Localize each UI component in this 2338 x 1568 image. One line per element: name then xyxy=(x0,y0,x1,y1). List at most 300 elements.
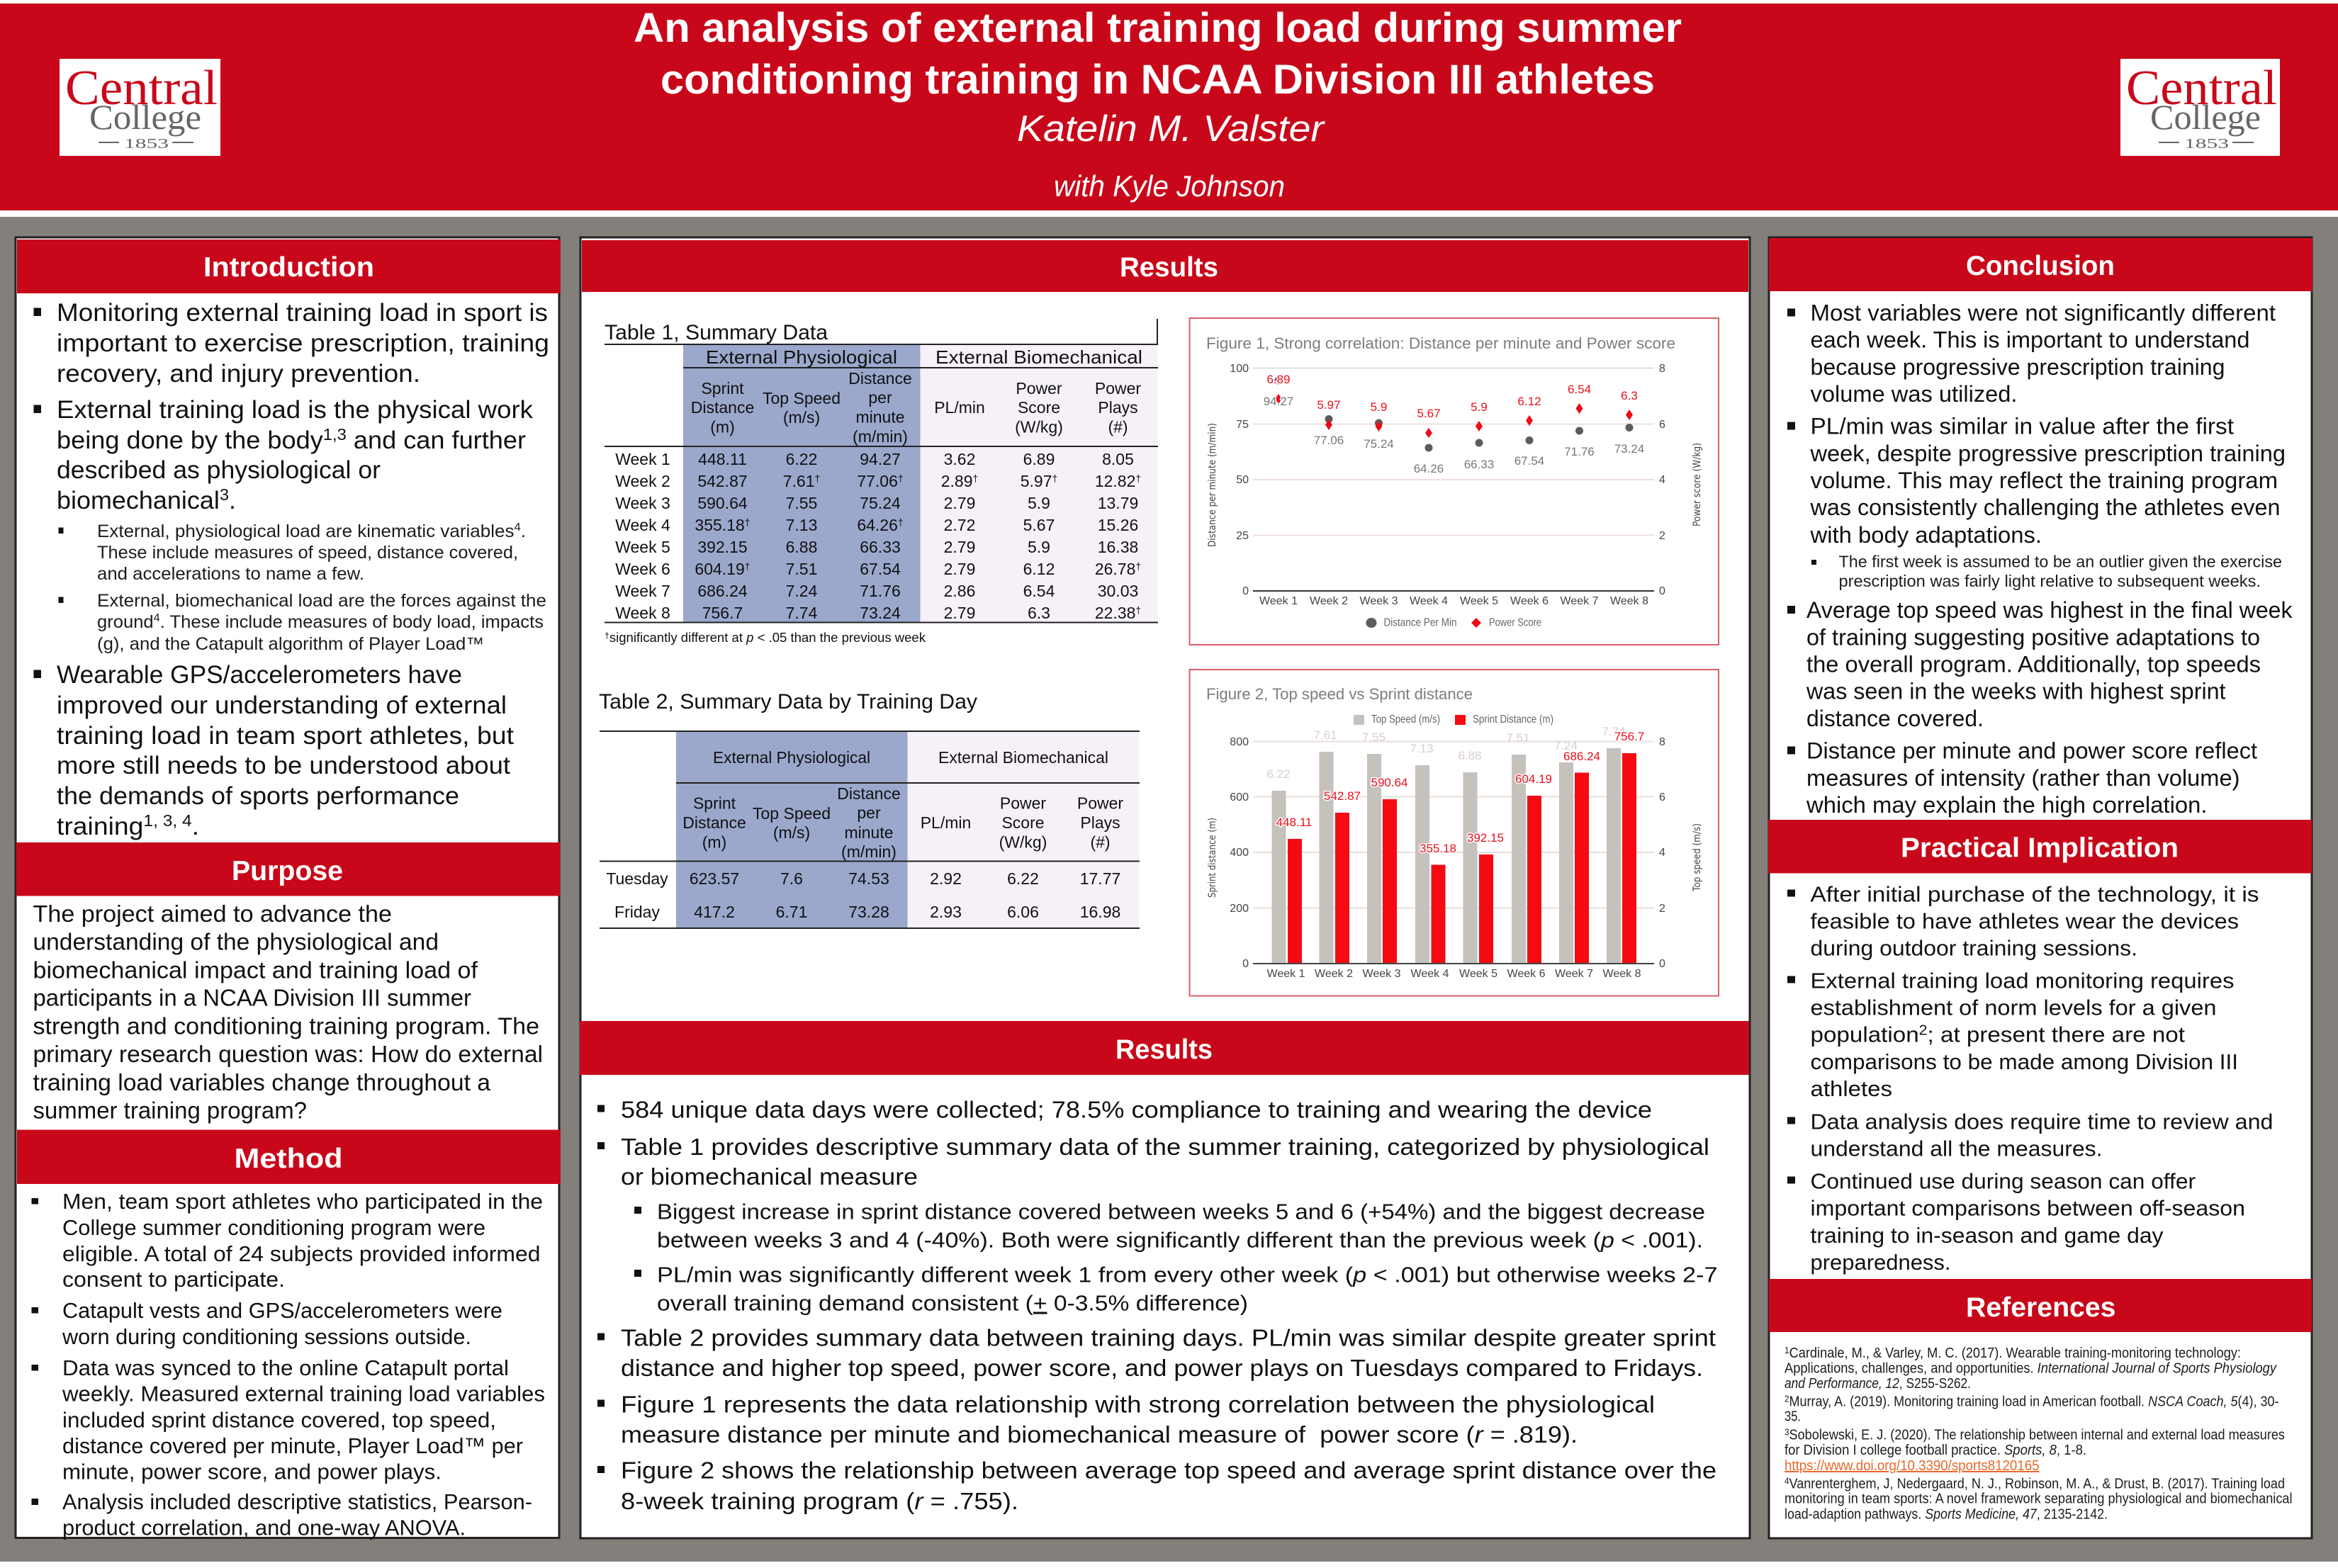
table 1: summary data: 6.3 xyxy=(1028,604,1050,622)
table 1: summary data: Week 7 xyxy=(615,582,670,600)
text block: references: Applications, challenges, and opportunities. International Journal of Sports Physiology xyxy=(1785,1360,2277,1376)
table 2: summary data by training day: (m/s) xyxy=(773,823,810,842)
table 1: summary data: 6.89 xyxy=(1023,450,1055,468)
table 1: summary data: 13.79 xyxy=(1098,494,1138,512)
chart: figure 2 bars: Week 4 xyxy=(1411,968,1449,980)
heading: purpose: Purpose xyxy=(232,856,343,886)
text block: introduction: improved our understanding of external xyxy=(57,692,507,719)
table 1: summary data: 6.12 xyxy=(1023,560,1055,578)
chart: figure 1 scatter: 0 xyxy=(1659,585,1665,597)
table 2: summary data by training day: minute xyxy=(844,823,894,842)
text block: conclusion: because progressive prescription training xyxy=(1810,354,2225,380)
text block: method: product correlation, and one-way ANOVA. xyxy=(62,1515,466,1540)
text block: introduction: recovery, and injury prevention. xyxy=(57,360,420,388)
table 2: summary data by training day: Distance xyxy=(682,813,746,832)
text block: method: included sprint distance covered, top speed, xyxy=(62,1407,496,1433)
text block: results xyxy=(597,1097,1718,1514)
text block: conclusion: distance covered. xyxy=(1806,706,1984,731)
chart: figure 2 bars: Week 3 xyxy=(1363,968,1401,980)
text block: purpose: summer training program? xyxy=(33,1097,307,1124)
table 1: summary data: 756.7 xyxy=(702,604,743,622)
table 1: summary data: Week 4 xyxy=(615,516,670,534)
text block: purpose: biomechanical impact and training load of xyxy=(33,957,478,983)
text block: introduction: described as physiological or xyxy=(57,456,381,484)
table 2: summary data by training day: Plays xyxy=(1080,813,1120,832)
text block: conclusion: of training suggesting positive adaptations to xyxy=(1806,625,2260,650)
table 1: summary data: 5.9 xyxy=(1028,538,1050,556)
text block: conclusion: PL/min was similar in value after the first xyxy=(1810,414,2234,439)
table 1: summary data: 22.38† xyxy=(1095,604,1141,622)
text block: introduction: the demands of sports performance xyxy=(57,782,459,810)
text block: conclusion xyxy=(1787,300,2293,818)
table 1: summary data: Sprint xyxy=(701,379,744,397)
table 1: summary data: 66.33 xyxy=(860,538,901,556)
text block: practical implication: understand all the measures. xyxy=(1810,1136,2102,1161)
text block: practical implication: Data analysis does require time to review and xyxy=(1810,1110,2274,1134)
chart: figure 1 scatter: 64.26 xyxy=(1414,462,1444,475)
text block: practical implication: Continued use during season can offer xyxy=(1810,1169,2196,1193)
table 1: summary data: 542.87 xyxy=(697,472,748,490)
table 2: summary data by training day: per xyxy=(857,803,881,822)
text block: conclusion: volume. This may reflect the training program xyxy=(1810,468,2278,493)
text block: introduction: External training load is the physical work xyxy=(57,396,534,424)
text block: references: and Performance, 12, S255-S262. xyxy=(1785,1376,1971,1392)
text block: references: for Division I college football practice. Sports, 8, 1-8. xyxy=(1785,1443,2086,1458)
text block: conclusion: each week. This is important to understand xyxy=(1810,327,2249,353)
legend: Sprint Distance (m) xyxy=(1473,714,1553,726)
heading: introduction: Introduction xyxy=(203,252,374,283)
table 2: summary data by training day: Tuesday xyxy=(606,869,668,888)
chart: figure 2 bars: 756.7 xyxy=(1614,730,1644,743)
chart: figure 2 bars: 800 xyxy=(1230,736,1249,748)
text block: introduction: These include measures of speed, distance covered, xyxy=(97,543,518,563)
table 1: summary data: 16.38 xyxy=(1098,538,1138,556)
table 2: summary data by training day: 2.92 xyxy=(930,869,962,888)
legend xyxy=(1354,714,1553,726)
text block: method: weekly. Measured external training load variables xyxy=(62,1382,545,1406)
chart: figure 2 bars: 7.13 xyxy=(1410,742,1434,755)
text block: conclusion: measures of intensity (rather than volume) xyxy=(1806,765,2239,791)
chart: figure 1 scatter: Week 7 xyxy=(1561,595,1599,607)
logo: left: Central xyxy=(65,61,218,115)
heading: references: References xyxy=(1966,1292,2116,1323)
table 2: summary data by training day xyxy=(599,690,1140,928)
table 1: summary data: 2.79 xyxy=(944,604,975,622)
table 1: summary data: 8.05 xyxy=(1102,450,1134,468)
text block: introduction: training 1, 3, 4. xyxy=(57,811,199,840)
chart: figure 2 bars: Week 1 xyxy=(1267,968,1305,980)
table 1: summary data: Power xyxy=(1016,379,1062,397)
chart: figure 2 bars: 8 xyxy=(1659,736,1665,748)
text block: practical implication: comparisons to be made among Division III xyxy=(1810,1049,2238,1074)
text block: practical implication: External training load monitoring requires xyxy=(1810,968,2234,993)
text block: results: PL/min was significantly different week 1 from every other week ( p < .001) but otherwise weeks 2-7 xyxy=(657,1263,1718,1287)
text block: introduction xyxy=(34,299,549,840)
chart: figure 2 bars: 400 xyxy=(1230,847,1249,859)
table 2: summary data by training day: (#) xyxy=(1090,833,1111,852)
panel: right column xyxy=(1768,237,2312,1538)
table 1: summary data xyxy=(605,319,1158,645)
text block: introduction: important to exercise prescription, training xyxy=(57,329,549,357)
data points: distance per minute xyxy=(1274,377,1633,452)
chart: figure 1 scatter: 75.24 xyxy=(1364,437,1394,451)
text block: purpose xyxy=(33,901,543,1124)
legend: Distance Per Min xyxy=(1383,616,1457,629)
logo: left xyxy=(60,59,220,156)
text block: introduction: more still needs to be understood about xyxy=(57,752,510,779)
chart: figure 2 bars: 7.51 xyxy=(1506,731,1530,745)
table 1: summary data: 2.79 xyxy=(944,560,975,578)
chart: figure 2 bars: 0 xyxy=(1242,958,1249,970)
logo: right: 1853 xyxy=(2184,136,2229,152)
table 1: summary data: (#) xyxy=(1108,418,1128,436)
legend xyxy=(1366,616,1541,629)
table 1: summary data: 75.24 xyxy=(860,494,901,512)
text block: references: 35. xyxy=(1785,1409,1801,1424)
table 1: summary data: 2.79 xyxy=(944,538,975,556)
text block: references: 4Vanrenterghem, J, Nedergaard, N. J., Robinson, M. A., & Drust, B. (2017). Training load xyxy=(1785,1475,2285,1492)
chart: figure 1 scatter xyxy=(1189,318,1719,645)
logo: left: College xyxy=(89,97,201,137)
text block: conclusion: was consistently challenging the athletes even xyxy=(1809,495,2281,520)
text block: results: between weeks 3 and 4 (-40%). Both were significantly different than the previous week ( p < .001). xyxy=(657,1227,1703,1253)
chart: figure 2 bars: 6.22 xyxy=(1266,767,1291,781)
chart: figure 2 bars: 600 xyxy=(1230,791,1249,803)
chart: figure 2 bars: 355.18 xyxy=(1420,842,1456,855)
heading: results (lower): Results xyxy=(1115,1034,1213,1065)
table 1: summary data: 3.62 xyxy=(944,450,975,468)
table 1: summary data: 7.61† xyxy=(783,472,820,490)
table 2: summary data by training day: Power xyxy=(1000,794,1046,812)
chart: figure 2 bars: 4 xyxy=(1659,847,1665,859)
table 1: summary data: 30.03 xyxy=(1098,582,1138,600)
table 1: summary data: 2.72 xyxy=(944,516,975,534)
table 2: summary data by training day: (m/min) xyxy=(841,842,897,861)
table 1: summary data: 5.67 xyxy=(1023,516,1055,534)
text block: conclusion: The first week is assumed to be an outlier given the exercise xyxy=(1838,553,2282,571)
text block: practical implication: important comparisons between off-season xyxy=(1810,1196,2245,1220)
table 1: summary data: †significantly different at p < .05 than the previous week xyxy=(605,631,926,645)
chart: figure 2 bars: 0 xyxy=(1659,958,1665,970)
table 2: summary data by training day: 7.6 xyxy=(780,869,803,888)
chart: figure 2 bars: 2 xyxy=(1659,903,1665,915)
table 1: summary data: 71.76 xyxy=(860,582,901,600)
table 1: summary data: 2.79 xyxy=(944,494,975,512)
table 1: summary data: External Physiological xyxy=(706,346,897,368)
chart: figure 2 bars: 448.11 xyxy=(1276,816,1312,829)
logo: left: 1853 xyxy=(124,136,169,152)
text block: purpose: primary research question was: How do external xyxy=(33,1041,543,1067)
table 2: summary data by training day: PL/min xyxy=(921,813,971,832)
chart: figure 1 scatter: Week 2 xyxy=(1310,595,1348,607)
text block: practical implication: preparedness. xyxy=(1810,1250,1950,1275)
chart: figure 1 scatter: Week 3 xyxy=(1360,595,1398,607)
chart: figure 2 bars: Week 6 xyxy=(1507,968,1546,980)
chart: figure 1 scatter: 5.67 xyxy=(1417,407,1441,420)
table 2: summary data by training day: Sprint xyxy=(693,794,736,812)
title: conditioning training in NCAA Division III athletes xyxy=(661,57,1655,103)
legend: Power Score xyxy=(1489,616,1541,629)
chart: figure 2 bars: 6.88 xyxy=(1458,749,1482,762)
table 1: summary data: minute xyxy=(855,408,905,427)
chart: figure 1 scatter: Figure 1, Strong correlation: Distance per minute and Power score xyxy=(1206,334,1675,352)
text block: introduction: ground4. These include measures of body load, impacts xyxy=(97,612,544,632)
text block: references: https://www.doi.org/10.3390/sports8120165 xyxy=(1785,1458,2040,1474)
table 1: summary data: (m/min) xyxy=(853,427,908,446)
text block: introduction: biomechanical 3. xyxy=(57,485,236,514)
chart: figure 2 bars: 542.87 xyxy=(1324,789,1361,803)
chart: figure 1 scatter: 5.9 xyxy=(1371,400,1387,414)
text block: introduction: Monitoring external training load in sport is xyxy=(57,299,548,327)
table 1: summary data: 26.78† xyxy=(1095,560,1141,578)
chart: figure 1 scatter: 6 xyxy=(1659,419,1665,431)
text block: purpose: strength and conditioning training program. The xyxy=(33,1013,539,1039)
chart: figure 1 scatter: 8 xyxy=(1659,363,1665,375)
text block: results: Figure 2 shows the relationship between average top speed and average sprint distance over the xyxy=(621,1457,1716,1484)
text block: references: 1Cardinale, M., & Varley, M. C. (2017). Wearable training-monitoring technology: xyxy=(1785,1345,2241,1361)
table 1: summary data: (W/kg) xyxy=(1015,418,1063,436)
author: Katelin M. Valster xyxy=(1017,108,1326,150)
text block: method: minute, power score, and power plays. xyxy=(62,1460,442,1484)
chart: figure 2 bars: 6 xyxy=(1659,791,1665,803)
chart: figure 2 bars: 200 xyxy=(1230,903,1249,915)
table 1: summary data: Distance xyxy=(691,398,754,417)
text block: conclusion: Average top speed was highest in the final week xyxy=(1806,597,2293,623)
text block: introduction: Wearable GPS/accelerometers have xyxy=(57,661,462,689)
chart: figure 2 bars: 7.55 xyxy=(1362,731,1386,744)
text block: introduction: External, biomechanical load are the forces against the xyxy=(97,591,546,611)
text block: results: Table 2 provides summary data between training days. PL/min was similar despite greater sprint xyxy=(621,1325,1716,1350)
table 1: summary data: 2.89† xyxy=(941,472,978,490)
text block: references: monitoring in team sports: A novel framework separating physiological and biomechanical xyxy=(1785,1491,2292,1506)
text block: practical implication xyxy=(1787,881,2274,1275)
chart: figure 1 scatter: 6.54 xyxy=(1568,383,1591,396)
chart: figure 1 scatter: 50 xyxy=(1236,474,1249,486)
chart: figure 1 scatter: Power score (W/kg) xyxy=(1692,443,1703,526)
chart: figure 1 scatter: 71.76 xyxy=(1564,445,1595,458)
text block: introduction: being done by the body 1,3 and can further xyxy=(57,425,526,454)
table 1: summary data: 67.54 xyxy=(860,560,901,578)
chart: figure 1 scatter: Week 1 xyxy=(1259,595,1298,607)
logo: right: College xyxy=(2150,97,2261,137)
title: An analysis of external training load during summer xyxy=(634,5,1682,51)
legend: Top Speed (m/s) xyxy=(1371,714,1440,726)
table 1: summary data: 686.24 xyxy=(697,582,748,600)
text block: method: Men, team sport athletes who participated in the xyxy=(62,1189,543,1214)
table 1: summary data: 7.13 xyxy=(786,516,817,534)
table 1: summary data: 6.22 xyxy=(786,450,817,468)
heading: conclusion: Conclusion xyxy=(1966,251,2115,281)
panel: middle column xyxy=(580,237,1750,1538)
table 1: summary data: Plays xyxy=(1098,398,1138,417)
table 1: summary data: Top Speed xyxy=(763,389,841,407)
table 1: summary data: 604.19† xyxy=(695,560,751,578)
text block: practical implication: After initial purchase of the technology, it is xyxy=(1810,881,2259,907)
chart: figure 1 scatter: 6.12 xyxy=(1517,395,1541,408)
table 1: summary data: 6.88 xyxy=(786,538,817,556)
table 2: summary data by training day: 623.57 xyxy=(690,869,739,888)
text block: references xyxy=(1785,1345,2292,1522)
table 1: summary data: 448.11 xyxy=(698,450,747,468)
text block: conclusion: prescription was fairly light relative to subsequent weeks. xyxy=(1838,572,2261,590)
table 1: summary data: 77.06† xyxy=(857,472,904,490)
text block: conclusion: with body adaptations. xyxy=(1809,522,2042,548)
text block: results: Figure 1 represents the data relationship with strong correlation between the physiological xyxy=(621,1392,1655,1417)
header banner xyxy=(0,4,2338,210)
chart: figure 2 bars: Week 2 xyxy=(1315,968,1353,980)
chart: figure 2 bars: Top speed (m/s) xyxy=(1692,823,1703,892)
table 2: summary data by training day: External Physiological xyxy=(713,748,870,767)
chart: figure 1 scatter: 94.27 xyxy=(1264,395,1293,408)
text block: method: Data was synced to the online Catapult portal xyxy=(62,1355,509,1380)
chart: figure 1 scatter: 2 xyxy=(1659,530,1665,542)
table 1: summary data: 7.51 xyxy=(786,560,817,578)
table 2: summary data by training day: (m) xyxy=(702,833,726,852)
co-author: with Kyle Johnson xyxy=(1054,169,1285,203)
chart: figure 1 scatter: 6.3 xyxy=(1621,389,1638,402)
text block: references: 2Murray, A. (2019). Monitoring training load in American football. NSCA Coach, 5(4), 30- xyxy=(1785,1393,2279,1410)
table 1: summary data: 73.24 xyxy=(860,604,901,622)
chart: figure 2 bars: Week 8 xyxy=(1603,968,1641,980)
chart: figure 1 scatter: Week 5 xyxy=(1460,595,1498,607)
table 1: summary data: 7.74 xyxy=(786,604,818,622)
text block: results: measure distance per minute and biomechanical measure of power score ( r = .819). xyxy=(621,1421,1578,1448)
table 1: summary data: 392.15 xyxy=(697,538,748,556)
text block: conclusion: Most variables were not significantly different xyxy=(1810,300,2276,326)
table 2: summary data by training day: 6.71 xyxy=(776,903,807,921)
table 1: summary data: Distance xyxy=(848,369,912,388)
chart: figure 2 bars: Figure 2, Top speed vs Sprint distance xyxy=(1206,685,1473,703)
text block: introduction: training load in team sport athletes, but xyxy=(57,722,514,750)
text block: conclusion: Distance per minute and power score reflect xyxy=(1806,738,2257,764)
table 1: summary data: Week 6 xyxy=(615,560,670,578)
chart: figure 2 bars: 7.61 xyxy=(1313,728,1337,742)
table 1: summary data: (m/s) xyxy=(783,408,820,427)
table 1: summary data: 5.97† xyxy=(1021,472,1057,490)
table 2: summary data by training day: External Biomechanical xyxy=(938,748,1108,767)
text block: conclusion: volume was utilized. xyxy=(1810,381,2017,407)
table 2: summary data by training day: 73.28 xyxy=(848,903,889,921)
chart: figure 1 scatter: Week 6 xyxy=(1510,595,1549,607)
table 2: summary data by training day: Table 2, Summary Data by Training Day xyxy=(599,690,977,714)
table 1: summary data: (m) xyxy=(710,418,735,436)
text block: references: load-adaption pathways. Sports Medicine, 47, 2135-2142. xyxy=(1785,1506,2108,1522)
table 1: summary data: per xyxy=(868,388,892,407)
text block: method: Catapult vests and GPS/accelerometers were xyxy=(62,1298,502,1323)
text block: results: 584 unique data days were collected; 78.5% compliance to training and wearing the device xyxy=(621,1097,1652,1122)
chart: figure 1 scatter: 75 xyxy=(1236,419,1249,431)
text block: practical implication: establishment of norm levels for a given xyxy=(1810,995,2217,1020)
text block: results: overall training demand consistent ( + 0-3.5% difference) xyxy=(657,1291,1248,1315)
table 1: summary data: 94.27 xyxy=(860,450,901,468)
table 2: summary data by training day: Distance xyxy=(837,784,901,803)
table 2: summary data by training day: 2.93 xyxy=(930,903,962,921)
table 1: summary data: 12.82† xyxy=(1095,472,1141,490)
table 2: summary data by training day: 6.22 xyxy=(1007,869,1039,888)
chart: figure 1 scatter: Distance per minute (m/min) xyxy=(1207,423,1218,547)
bars: top speed xyxy=(1271,748,1621,964)
chart: figure 1 scatter: Week 8 xyxy=(1610,595,1648,607)
table 1: summary data: 7.24 xyxy=(786,582,818,600)
table 2: summary data by training day: Power xyxy=(1077,794,1123,812)
chart: figure 1 scatter: 0 xyxy=(1242,585,1249,597)
chart: figure 2 bars: 604.19 xyxy=(1515,772,1552,786)
chart: figure 1 scatter: 5.97 xyxy=(1317,398,1341,412)
chart: figure 1 scatter: 73.24 xyxy=(1614,442,1644,456)
chart: figure 2 bars xyxy=(1189,670,1719,996)
text block: purpose: The project aimed to advance the xyxy=(33,901,392,927)
text block: purpose: participants in a NCAA Division III summer xyxy=(33,985,471,1010)
chart: figure 2 bars: 686.24 xyxy=(1563,750,1600,763)
text block: results: Table 1 provides descriptive summary data of the summer training, categorized by physiological xyxy=(621,1134,1709,1160)
chart: figure 2 bars: 7.74 xyxy=(1602,725,1626,738)
logo: right: Central xyxy=(2126,61,2277,115)
text block: results: 8-week training program ( r = .755). xyxy=(621,1488,1018,1514)
table 2: summary data by training day: 6.06 xyxy=(1007,903,1039,921)
table 2: summary data by training day: Friday xyxy=(614,903,660,921)
table 2: summary data by training day: 17.77 xyxy=(1080,869,1120,888)
text block: purpose: understanding of the physiological and xyxy=(33,928,439,955)
data points: power score xyxy=(1275,394,1633,438)
text block: results: Biggest increase in sprint distance covered between weeks 5 and 6 (+54%) and the biggest decrease xyxy=(657,1199,1705,1224)
table 1: summary data: Week 8 xyxy=(615,604,670,622)
table 2: summary data by training day: 74.53 xyxy=(848,869,889,888)
table 1: summary data: 355.18† xyxy=(695,516,751,534)
text block: practical implication: feasible to have athletes wear the devices xyxy=(1810,908,2239,934)
title xyxy=(634,5,1682,103)
heading: practical implication: Practical Implication xyxy=(1901,833,2179,863)
table 1: summary data: Score xyxy=(1018,398,1060,417)
table 2: summary data by training day: Score xyxy=(1001,813,1045,832)
table 1: summary data: Week 2 xyxy=(615,472,670,490)
text block: introduction: (g), and the Catapult algorithm of Player Load™ xyxy=(97,634,484,654)
chart: figure 1 scatter: 66.33 xyxy=(1464,458,1494,471)
table 1: summary data: 15.26 xyxy=(1098,516,1138,534)
table 1: summary data: PL/min xyxy=(934,398,985,417)
table 1: summary data: Week 3 xyxy=(615,494,670,512)
bars: sprint distance xyxy=(1288,753,1636,964)
table 1: summary data: Power xyxy=(1095,379,1141,397)
text block: introduction: and accelerations to name a few. xyxy=(97,564,364,584)
table 2: summary data by training day: (W/kg) xyxy=(999,833,1047,852)
text block: purpose: training load variables change throughout a xyxy=(33,1069,491,1095)
text block: conclusion: which may explain the high correlation. xyxy=(1806,792,2207,818)
table 1: summary data: 590.64 xyxy=(697,494,748,512)
table 1: summary data: 64.26† xyxy=(857,516,904,534)
text block: method: College summer conditioning program were xyxy=(62,1215,485,1240)
table 1: summary data: 6.54 xyxy=(1023,582,1055,600)
text block: conclusion: was seen in the weeks with highest sprint xyxy=(1806,679,2226,704)
heading: method: Method xyxy=(234,1144,343,1174)
text block: practical implication: population 2; at present there are not xyxy=(1810,1022,2185,1047)
chart: figure 1 scatter: 4 xyxy=(1659,474,1665,486)
chart: figure 1 scatter: 25 xyxy=(1236,530,1249,542)
text block: method: distance covered per minute, Player Load™ per xyxy=(62,1433,523,1458)
chart: figure 2 bars: 590.64 xyxy=(1371,776,1407,789)
panel: left column xyxy=(0,237,574,1562)
table 1: summary data: Table 1, Summary Data xyxy=(605,321,828,344)
table 1: summary data: 5.9 xyxy=(1028,494,1050,512)
chart: figure 1 scatter: 6.89 xyxy=(1266,373,1291,386)
chart: figure 1 scatter: 77.06 xyxy=(1314,434,1344,447)
text block: results: distance and higher top speed, power score, and power plays on Tuesdays compared to Fridays. xyxy=(621,1355,1703,1381)
chart: figure 1 scatter: 5.9 xyxy=(1471,400,1488,414)
text block: conclusion: week, despite progressive prescription training xyxy=(1809,441,2286,466)
table 1: summary data: 2.86 xyxy=(944,582,975,600)
chart: figure 2 bars: Week 7 xyxy=(1555,968,1593,980)
chart: figure 2 bars: Week 5 xyxy=(1459,968,1497,980)
table 2: summary data by training day: Top Speed xyxy=(753,804,831,823)
